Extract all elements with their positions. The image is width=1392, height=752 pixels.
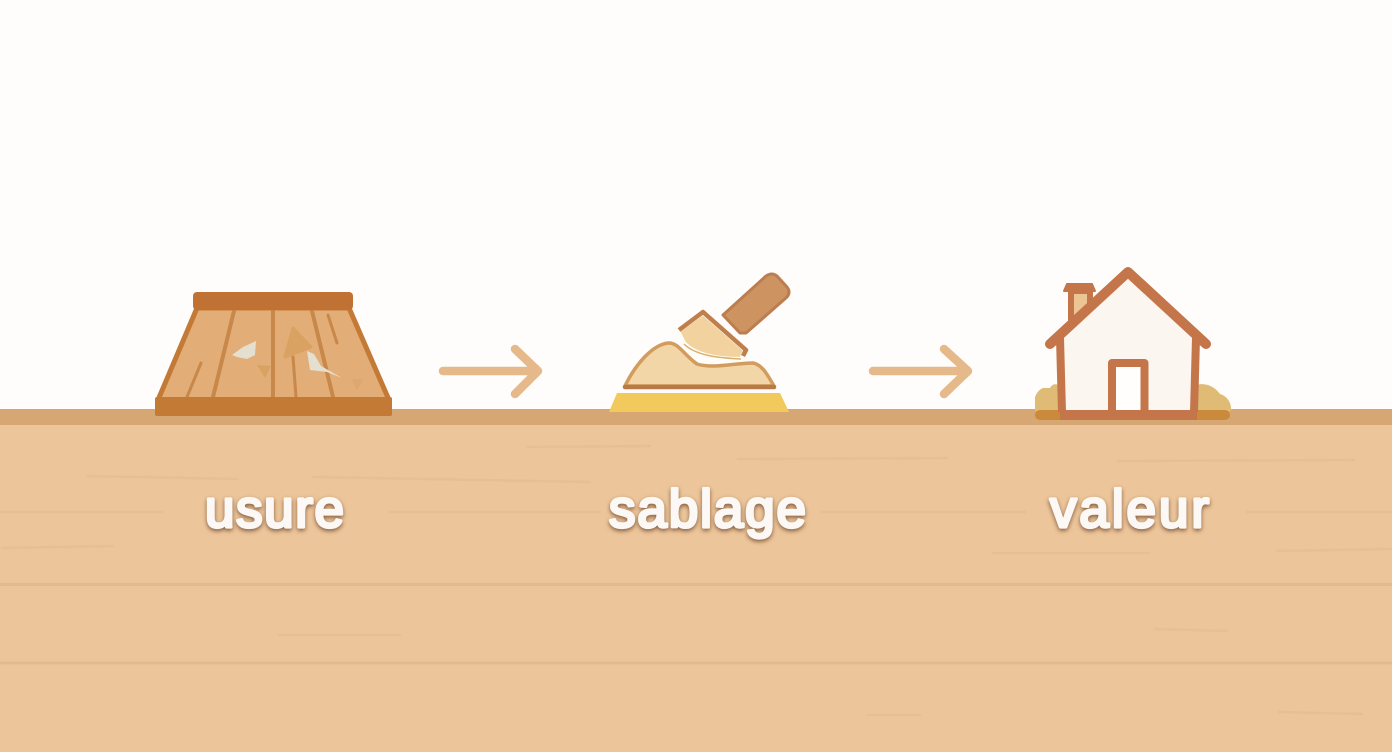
bushes xyxy=(1035,384,1231,411)
icon: sanding trowel xyxy=(609,274,789,412)
door xyxy=(1112,363,1144,412)
label: valeur: valeur xyxy=(1050,480,1209,539)
trowel blade xyxy=(678,313,745,359)
background: wood floor xyxy=(0,409,1392,752)
label: usure: usure xyxy=(205,480,344,539)
icon: worn wood floor xyxy=(155,292,392,416)
arrow 2 xyxy=(873,349,968,394)
sand mound xyxy=(625,343,774,386)
sand base xyxy=(609,393,789,412)
roof xyxy=(1050,272,1206,344)
arrow 1 xyxy=(443,349,538,394)
icon: house xyxy=(1035,272,1231,420)
walls xyxy=(1060,277,1196,412)
base bar xyxy=(1035,410,1230,420)
trowel handle xyxy=(723,274,789,333)
chimney xyxy=(1071,291,1090,327)
label: sablage: sablage xyxy=(609,480,806,539)
background: wall xyxy=(0,0,1392,410)
